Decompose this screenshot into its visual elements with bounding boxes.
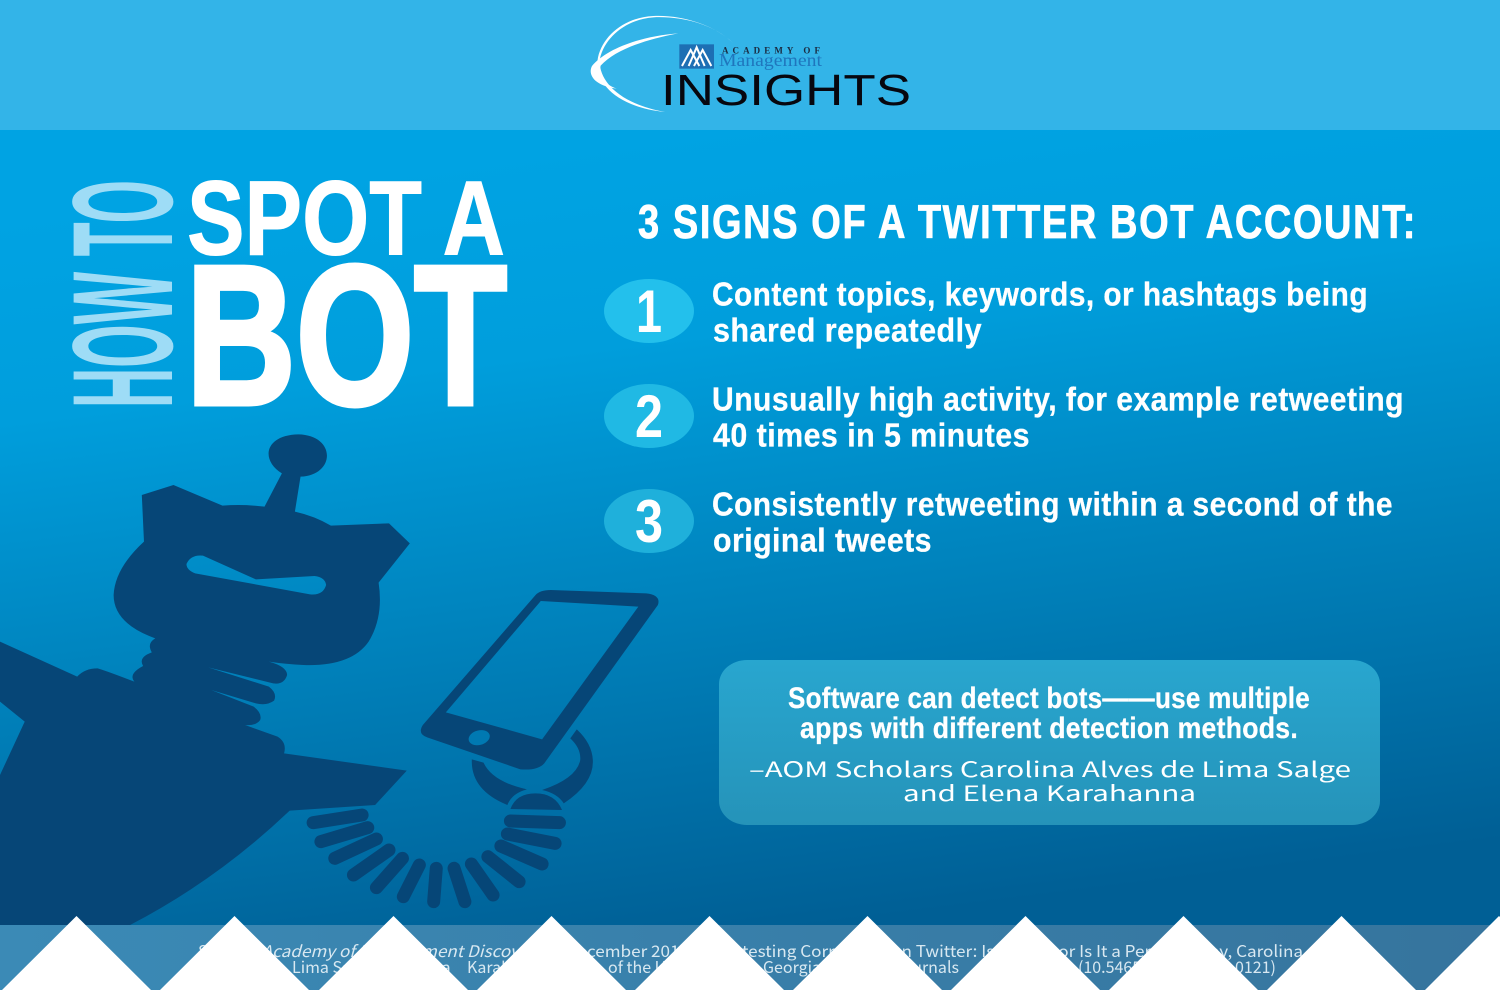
footer source text: 0121)	[1235, 954, 1276, 978]
icon: logo swoosh	[591, 16, 733, 112]
number badge 2	[604, 383, 694, 450]
sign 1 text: Content topics, keywords, or hashtags being	[712, 276, 1368, 312]
callout main text: Software can detect bots——use multiple	[788, 682, 1310, 715]
coiled arm	[313, 815, 559, 902]
sign 1 text: shared repeatedly	[713, 312, 982, 348]
illustration: robot holding phone	[0, 434, 659, 925]
claw left	[472, 759, 527, 805]
logo: Academy of Management Insights	[591, 16, 911, 115]
footer source text: Karahanna, both	[467, 954, 591, 978]
header band	[0, 0, 1500, 130]
phone	[421, 590, 659, 770]
title: spot a: SPOT A	[187, 160, 505, 278]
claw right	[542, 729, 593, 803]
footer source text: Alves de	[219, 954, 280, 978]
icon: logo mountain square	[679, 44, 714, 69]
callout attribution: and Elena Karahanna	[903, 778, 1196, 808]
number badge 2: 2	[635, 383, 663, 450]
phone home button	[465, 727, 494, 748]
sign 2 text: Unusually high activity, for example retweeting	[712, 380, 1404, 418]
number badge 1: 1	[636, 278, 662, 345]
number badge 3	[604, 488, 694, 555]
footer source text: (10.5465/amd.2016.	[1078, 954, 1225, 978]
sign 1 text	[712, 276, 1368, 348]
sign 2 text: 40 times in 5 minutes	[713, 416, 1030, 454]
robot body and head	[0, 434, 410, 925]
callout: quote panel	[719, 660, 1380, 825]
footer source text: Source: Academy of Management Discoveries , December 2018, “Protesting Corruption on Twitter: Is It a Bot or Is It a Person?” by, Carolina	[198, 938, 1303, 962]
title: bot: BOT	[186, 225, 507, 447]
wrist dome	[510, 793, 562, 810]
number badge 3: 3	[635, 488, 663, 555]
callout main text	[788, 682, 1310, 745]
footer source text: of the University of	[608, 954, 749, 978]
footer source text	[198, 938, 1303, 978]
number badge 1	[604, 278, 694, 345]
sign 3	[604, 486, 1393, 558]
sign 2	[604, 380, 1404, 454]
footer source text: Georgia. AOM	[763, 954, 864, 978]
logo text: management: Management	[719, 50, 822, 70]
title: how to spot a bot	[44, 160, 507, 447]
sign 3 text: original tweets	[713, 522, 932, 558]
sign 3 text: Consistently retweeting within a second of the	[712, 486, 1393, 522]
logo text: insights: INSIGHTS	[661, 67, 911, 115]
footer white zigzag edge	[0, 916, 1500, 1000]
logo text: academy of: ACADEMY OF	[722, 46, 820, 56]
page background	[0, 130, 1500, 925]
callout attribution: –AOM Scholars Carolina Alves de Lima Salge	[749, 754, 1351, 784]
sign 1	[604, 276, 1368, 348]
callout attribution	[749, 754, 1351, 808]
sign 3 text	[712, 486, 1393, 558]
footer source text: Journals	[894, 954, 959, 978]
callout main text: apps with different detection methods.	[800, 712, 1298, 745]
footer band	[0, 925, 1500, 990]
footer source text: Lima Salge and Elena	[292, 954, 451, 978]
sign 2 text	[712, 380, 1404, 454]
